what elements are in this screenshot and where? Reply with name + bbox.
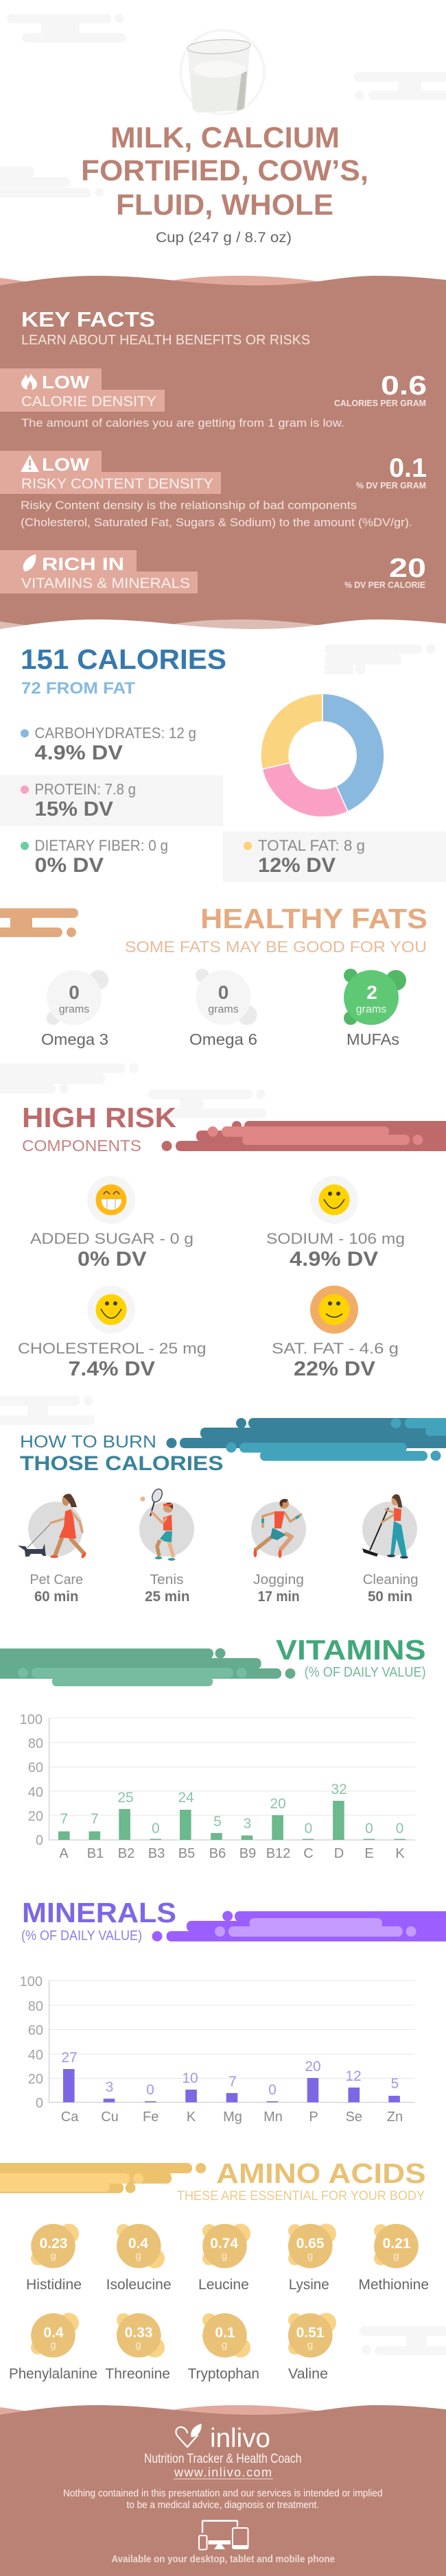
bar chart: vitamins: [20, 1712, 415, 1861]
amino: valine: [288, 2313, 336, 2382]
bar chart: minerals: 10: [182, 2070, 198, 2086]
bar chart: minerals: Mn: [263, 2110, 283, 2125]
bar chart: vitamins: 0: [305, 1821, 312, 1836]
amino: valine: 0.51: [296, 2325, 325, 2341]
badge: MUFAs: [344, 969, 406, 1048]
icon: leaf: [23, 554, 36, 571]
bar chart: minerals: 20: [305, 2059, 321, 2075]
banner: vitamins: [0, 1648, 295, 1686]
bar chart: vitamins: 25: [117, 1790, 134, 1806]
icon: person sweeping: [362, 1494, 408, 1559]
badge: MUFAs: MUFAs: [347, 1030, 399, 1048]
subheading: minerals: (% OF DAILY VALUE): [21, 1928, 142, 1943]
stat: total fat: [223, 831, 446, 882]
disclaimer: to be a medical advice, diagnosis or treatment.: [126, 2500, 319, 2511]
item: saturated fat: 22% DV: [294, 1358, 375, 1380]
activity: pet care: [18, 1494, 87, 1605]
heading: amino acids: AMINO ACIDS: [216, 2158, 426, 2189]
bar chart: vitamins: 32: [331, 1782, 347, 1797]
amino: tryptophan: 0.1: [215, 2325, 235, 2341]
amino: phenylalanine: g: [50, 2339, 56, 2351]
bar chart: vitamins: 100: [20, 1712, 43, 1727]
item: sodium: SODIUM - 106 mg: [266, 1230, 405, 1247]
bar chart: vitamins: 80: [28, 1736, 43, 1751]
title: FLUID, WHOLE: [116, 189, 333, 222]
badge: omega 3: grams: [59, 1004, 89, 1015]
bar chart: minerals: Mg: [223, 2110, 242, 2125]
bar chart: vitamins: 20: [28, 1809, 43, 1824]
heading: calories: 151 CALORIES: [21, 643, 226, 675]
panel: vitamins: [0, 1634, 426, 1861]
item: sodium: [266, 1176, 405, 1271]
fact: low risky content density: [0, 451, 427, 529]
amino: lysine: g: [307, 2250, 313, 2262]
panel: healthy fats: [0, 903, 427, 1048]
amino: lysine: 0.65: [296, 2236, 325, 2252]
stat: dietary fiber: [21, 837, 168, 877]
activity: jogging: [251, 1499, 306, 1605]
fact: rich in vitamins and minerals: VITAMINS & MINERALS: [21, 576, 190, 591]
bar chart: minerals: 5: [391, 2076, 399, 2092]
serving size: Cup (247 g / 8.7 oz): [156, 230, 292, 246]
subheading: amino acids: THESE ARE ESSENTIAL FOR YOUR BODY: [177, 2188, 425, 2203]
fact: rich in vitamins and minerals: 20: [389, 554, 426, 583]
bar chart: minerals: 27: [61, 2050, 78, 2066]
stat: carbohydrates: 4.9% DV: [34, 742, 123, 764]
subheading: components: COMPONENTS: [22, 1137, 141, 1155]
panel: key facts: [0, 276, 446, 640]
donut chart: [261, 694, 384, 817]
amino: threonine: Threonine: [105, 2366, 170, 2382]
disclaimer: [63, 2488, 383, 2511]
activity: cleaning: Cleaning: [363, 1572, 419, 1587]
bar chart: minerals: Ca: [61, 2110, 79, 2125]
bar chart: minerals: Zn: [387, 2110, 403, 2125]
fact: low calorie density: [0, 368, 427, 429]
icon: smiling emoji: [96, 1294, 126, 1325]
fact: low risky content density: 0.1: [389, 453, 427, 483]
panel: calories: [0, 643, 446, 882]
fact: rich in vitamins and minerals: % DV PER CALORIE: [344, 580, 425, 590]
amino: threonine: g: [135, 2339, 141, 2351]
bar chart: vitamins: 5: [213, 1814, 222, 1830]
bar chart: vitamins: 20: [270, 1796, 286, 1812]
activity: cleaning: 50 min: [368, 1589, 412, 1605]
bar chart: vitamins: 3: [244, 1816, 251, 1832]
heading: healthy fats: HEALTHY FATS: [200, 903, 427, 934]
fact: rich in vitamins and minerals: RICH IN: [42, 554, 124, 574]
icon: warning triangle: [21, 455, 39, 472]
amino: phenylalanine: 0.4: [43, 2325, 64, 2341]
stat: dietary fiber: 0% DV: [34, 854, 104, 877]
bar chart: minerals: Fe: [143, 2110, 159, 2125]
badge: omega 6: 0: [218, 982, 228, 1003]
heading: minerals: MINERALS: [22, 1897, 176, 1928]
amino: histidine: Histidine: [26, 2277, 82, 2293]
amino: phenylalanine: Phenylalanine: [9, 2366, 97, 2382]
item: saturated fat: [272, 1286, 399, 1380]
subheading: healthy fats: SOME FATS MAY BE GOOD FOR YOU: [125, 938, 427, 956]
item: sodium: 4.9% DV: [290, 1248, 378, 1271]
icon: jogger: [254, 1499, 302, 1558]
stat: carbohydrates: CARBOHYDRATES: 12 g: [34, 724, 196, 742]
heading: how to burn: HOW TO BURN: [20, 1432, 156, 1452]
bar chart: minerals: 40: [28, 2048, 43, 2063]
bar chart: vitamins: 7: [60, 1811, 68, 1827]
fact: low calorie density: The amount of calories you are getting from 1 gram is low.: [21, 416, 344, 429]
stat: total fat: TOTAL FAT: 8 g: [258, 837, 365, 854]
amino: leucine: g: [222, 2250, 227, 2262]
fact: low risky content density: RISKY CONTENT DENSITY: [21, 476, 213, 492]
activity: pet care: 60 min: [34, 1589, 78, 1605]
bar chart: minerals: 0: [146, 2082, 154, 2098]
bar chart: minerals: Cu: [101, 2110, 119, 2125]
amino: leucine: [198, 2224, 250, 2293]
bar chart: vitamins: B9: [239, 1846, 256, 1861]
amino: histidine: 0.23: [40, 2236, 67, 2252]
bar chart: minerals: 60: [28, 2023, 43, 2038]
activity: jogging: Jogging: [253, 1572, 304, 1587]
bar chart: minerals: 80: [28, 1999, 43, 2014]
amino: methionine: Methionine: [358, 2277, 429, 2293]
badge: omega 6: grams: [208, 1004, 239, 1015]
subheading: vitamins: (% OF DAILY VALUE): [305, 1665, 426, 1680]
amino: lysine: Lysine: [289, 2277, 329, 2293]
logo: inlivo: [176, 2424, 270, 2453]
amino: methionine: g: [393, 2250, 399, 2262]
bar chart: vitamins: 40: [28, 1785, 43, 1800]
icon: smiling emoji: [318, 1184, 350, 1216]
item: added sugar: [30, 1176, 193, 1271]
bar chart: minerals: K: [187, 2110, 196, 2125]
header: product image and title: [81, 30, 368, 246]
amino: leucine: Leucine: [198, 2277, 249, 2293]
item: cholesterol: [18, 1286, 206, 1380]
icon: tennis player: [140, 1487, 176, 1561]
badge: omega 3: Omega 3: [41, 1030, 108, 1048]
bar chart: vitamins: 0: [152, 1821, 160, 1836]
banner: amino acids: [0, 2163, 206, 2193]
badge: omega 6: Omega 6: [189, 1030, 257, 1048]
bar chart: vitamins: 0: [365, 1821, 373, 1836]
amino: tryptophan: [188, 2313, 259, 2382]
amino: isoleucine: Isoleucine: [106, 2277, 172, 2293]
bar chart: vitamins: A: [59, 1846, 69, 1861]
bar chart: minerals: 12: [345, 2068, 362, 2084]
title: MILK, CALCIUM: [110, 121, 340, 154]
bar chart: vitamins: K: [395, 1846, 405, 1861]
availability note: Available on your desktop, tablet and mobile phone: [111, 2553, 335, 2565]
amino: threonine: [105, 2313, 170, 2382]
panel: footer: [0, 2405, 446, 2576]
activity: cleaning: [362, 1494, 419, 1605]
bar chart: minerals: 20: [28, 2072, 43, 2087]
bar chart: minerals: [20, 1974, 415, 2125]
bar chart: vitamins: B3: [148, 1846, 165, 1861]
stat: carbohydrates: [21, 724, 196, 764]
fact: low calorie density: CALORIES PER GRAM: [334, 399, 426, 408]
bar chart: vitamins: 60: [28, 1760, 43, 1775]
fact: low risky content density: (Cholesterol, Saturated Fat, Sugars & Sodium) to the amount (%DV/gr).: [21, 516, 412, 529]
item: added sugar: ADDED SUGAR - 0 g: [30, 1230, 193, 1247]
stat: protein: PROTEIN: 7.8 g: [34, 781, 136, 798]
logo: inlivo: inlivo: [210, 2424, 270, 2453]
title: [81, 121, 368, 222]
bar chart: minerals: 3: [106, 2079, 113, 2095]
heading: vitamins: VITAMINS: [276, 1634, 426, 1666]
bar chart: vitamins: 0: [396, 1821, 403, 1836]
panel: high risk components: [18, 1102, 446, 1380]
bar chart: minerals: P: [309, 2110, 318, 2125]
banner: high risk: [162, 1121, 446, 1151]
icon: grinning emoji: [96, 1184, 126, 1216]
icon: flame: [21, 373, 37, 390]
stat: protein: 15% DV: [34, 798, 113, 820]
activity: jogging: 17 min: [258, 1589, 300, 1605]
bar chart: minerals: 100: [20, 1974, 43, 1989]
item: cholesterol: 7.4% DV: [69, 1358, 155, 1380]
stat: total fat: 12% DV: [258, 854, 336, 877]
item: added sugar: 0% DV: [78, 1248, 147, 1271]
icon: mild smile emoji: [318, 1294, 350, 1325]
item: saturated fat: SAT. FAT - 4.6 g: [272, 1340, 399, 1357]
amino: histidine: [26, 2224, 82, 2293]
panel: how to burn those calories: [18, 1418, 446, 1605]
bar chart: vitamins: B2: [118, 1846, 134, 1861]
disclaimer: Nothing contained in this presentation and our services is intended or implied: [63, 2488, 383, 2499]
bar chart: vitamins: B6: [209, 1846, 226, 1861]
amino: tryptophan: g: [222, 2339, 227, 2351]
banner: minerals: [152, 1911, 446, 1941]
amino: phenylalanine: [9, 2313, 97, 2382]
item: cholesterol: CHOLESTEROL - 25 mg: [18, 1340, 206, 1357]
bar chart: minerals: 7: [228, 2074, 237, 2090]
subheading: key facts: LEARN ABOUT HEALTH BENEFITS OR RISKS: [21, 333, 310, 348]
activity: tennis: [139, 1487, 194, 1605]
bar chart: vitamins: 24: [178, 1790, 194, 1806]
bar chart: vitamins: 7: [91, 1811, 99, 1827]
panel: amino acids: [0, 2158, 429, 2382]
fact: low risky content density: LOW: [42, 454, 90, 475]
bar chart: vitamins: B12: [266, 1846, 290, 1861]
bar chart: vitamins: B1: [87, 1846, 104, 1861]
amino: leucine: 0.74: [210, 2236, 238, 2252]
title: FORTIFIED, COW’S,: [81, 154, 368, 187]
activity: tennis: Tenis: [150, 1572, 184, 1587]
amino: histidine: g: [50, 2250, 56, 2262]
badge: omega 3: [41, 970, 108, 1048]
icon: desktop, tablet and phone: [199, 2520, 248, 2549]
bar chart: vitamins: E: [364, 1846, 374, 1861]
amino: methionine: 0.21: [383, 2236, 411, 2252]
amino: valine: Valine: [288, 2366, 328, 2382]
icon: glass of milk: [180, 30, 264, 114]
bar chart: minerals: 0: [36, 2096, 43, 2111]
amino: methionine: [358, 2224, 429, 2293]
heading: high risk: HIGH RISK: [22, 1102, 176, 1133]
fact: low calorie density: 0.6: [381, 371, 427, 401]
fact: low calorie density: LOW: [42, 372, 90, 392]
panel: minerals: [20, 1897, 446, 2125]
bar chart: minerals: Se: [346, 2110, 362, 2125]
stat: dietary fiber: DIETARY FIBER: 0 g: [34, 837, 168, 854]
amino: threonine: 0.33: [125, 2325, 152, 2341]
badge: MUFAs: grams: [356, 1004, 386, 1015]
fact: low calorie density: CALORIE DENSITY: [21, 394, 156, 410]
fact: low risky content density: Risky Content density is the relationship of bad components: [21, 499, 357, 512]
amino: tryptophan: Tryptophan: [188, 2366, 259, 2382]
bar chart: vitamins: C: [303, 1846, 314, 1861]
icon: woman walking dog: [18, 1494, 87, 1559]
amino: lysine: [288, 2224, 336, 2293]
heading: key facts: KEY FACTS: [21, 307, 155, 331]
bar chart: vitamins: 0: [36, 1833, 43, 1848]
bar chart: minerals: 0: [268, 2082, 277, 2098]
stat: protein: [0, 775, 224, 826]
bar chart: vitamins: B5: [178, 1846, 195, 1861]
banner: healthy fats: [0, 908, 78, 937]
heading: those calories: THOSE CALORIES: [20, 1452, 224, 1475]
amino: isoleucine: 0.4: [128, 2236, 148, 2252]
website link: www.inlivo.com: [174, 2466, 272, 2479]
activity: tennis: 25 min: [145, 1589, 189, 1605]
fact: low risky content density: % DV PER GRAM: [356, 481, 426, 491]
banner: burn calories: [166, 1418, 446, 1461]
fact: rich in vitamins and minerals: [0, 550, 426, 593]
amino: valine: g: [307, 2339, 313, 2351]
badge: MUFAs: 2: [366, 982, 377, 1003]
subheading: calories from fat: 72 FROM FAT: [21, 679, 135, 698]
amino: isoleucine: [106, 2224, 172, 2293]
bar chart: vitamins: D: [334, 1846, 344, 1861]
activity: pet care: Pet Care: [30, 1572, 83, 1587]
badge: omega 6: [189, 969, 257, 1048]
tagline: Nutrition Tracker & Health Coach: [144, 2452, 302, 2466]
badge: omega 3: 0: [69, 982, 80, 1003]
amino: isoleucine: g: [135, 2250, 141, 2262]
